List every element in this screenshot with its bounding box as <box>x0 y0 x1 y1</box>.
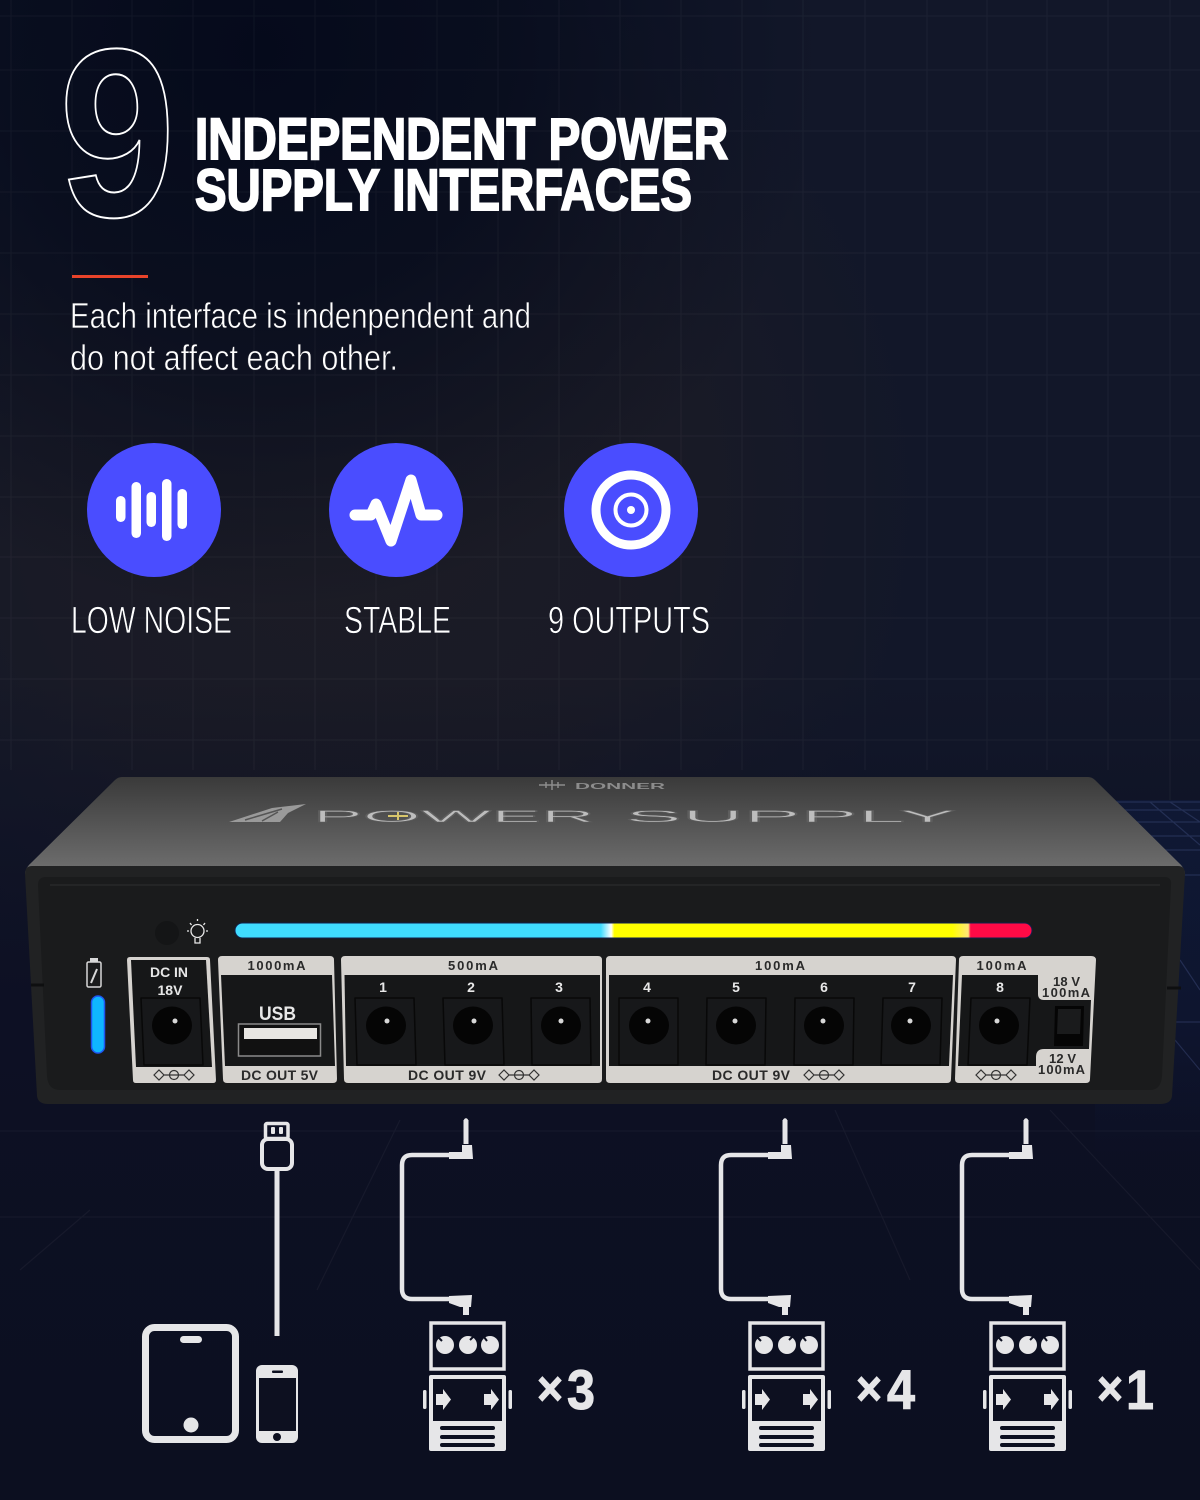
device front frame <box>25 866 1185 1104</box>
panel: 100mA outputs 4-7: 100mA <box>755 958 806 973</box>
polarity symbol <box>154 1070 194 1080</box>
voltage switch <box>1054 1006 1084 1046</box>
icon: battery <box>87 958 101 987</box>
brand logo and text: DONNER <box>575 782 666 791</box>
icon: tablet <box>146 1328 236 1440</box>
icon: phone <box>256 1365 298 1443</box>
switch labels: 100mA <box>1042 985 1091 1000</box>
jack 8 <box>968 998 1030 1065</box>
title: SUPPLY INTERFACES <box>195 158 692 223</box>
icon: sound wave <box>87 443 221 577</box>
feature: stable <box>329 443 463 642</box>
quantity label: 3 <box>567 1358 595 1421</box>
panel: output 8 with voltage switch: 8 <box>996 979 1004 995</box>
panel: 100mA outputs 4-7: 7 <box>908 979 916 995</box>
panel: 500mA outputs 1-3: 500mA <box>448 958 499 973</box>
title: INDEPENDENT POWER <box>195 107 728 172</box>
LED indicator bar <box>235 923 1032 938</box>
cable and pedal group: 4 pedals <box>721 1118 915 1451</box>
panel: USB 1000mA: DC OUT 5V <box>241 1067 319 1083</box>
title <box>195 107 728 223</box>
feature: low noise: LOW NOISE <box>71 600 232 642</box>
panel: 100mA outputs 4-7: 5 <box>732 979 740 995</box>
audio cable <box>962 1118 1033 1315</box>
pedal <box>742 1323 831 1451</box>
panel: DC in <box>127 957 216 1083</box>
pedal <box>423 1323 512 1451</box>
panel: 500mA outputs 1-3: 2 <box>467 979 475 995</box>
quantity label: 4 <box>887 1358 915 1421</box>
quantity label <box>1097 1358 1154 1421</box>
icon: target <box>564 443 698 577</box>
cable and pedal group: 3 pedals <box>402 1118 595 1451</box>
panel: 500mA outputs 1-3: DC OUT 9V <box>408 1067 487 1083</box>
audio cable <box>402 1118 473 1315</box>
polarity symbol <box>499 1070 539 1080</box>
USB cable <box>262 1124 292 1336</box>
product name: POWER <box>313 807 595 826</box>
light button <box>155 921 179 945</box>
jacks 1-3 <box>355 998 591 1065</box>
USB port <box>238 1024 320 1056</box>
switch labels: 18 V <box>1053 974 1080 989</box>
switch labels: 12 V <box>1049 1051 1076 1066</box>
big outlined numeral 9: 9 <box>59 0 176 267</box>
panel: 100mA outputs 4-7: DC OUT 9V <box>712 1067 791 1083</box>
quantity label <box>537 1358 595 1421</box>
panel: USB 1000mA: USB <box>259 1004 296 1025</box>
product name <box>313 807 956 826</box>
feature: 9 outputs <box>548 443 710 642</box>
power supply device <box>25 777 1185 1104</box>
DC in jack <box>141 998 203 1065</box>
description text <box>70 295 531 378</box>
panel: 500mA outputs 1-3: 3 <box>555 979 563 995</box>
quantity label <box>856 1358 915 1421</box>
brand logo and text <box>539 780 666 791</box>
panel: DC in: DC IN <box>150 964 188 980</box>
panel: 100mA outputs 4-7: 4 <box>643 979 651 995</box>
feature: 9 outputs: 9 OUTPUTS <box>548 600 710 642</box>
panel: 500mA outputs 1-3 <box>341 956 602 1083</box>
product name: SUPPLY <box>625 807 956 826</box>
description text: Each interface is indenpendent and <box>70 295 531 336</box>
switch labels: 100mA <box>1038 1062 1086 1077</box>
jacks 4-7 <box>619 998 942 1065</box>
quantity label: × <box>1097 1363 1123 1416</box>
red accent divider <box>72 275 148 278</box>
quantity label: × <box>856 1363 882 1416</box>
panel: 100mA outputs 4-7: 6 <box>820 979 828 995</box>
description text: do not affect each other. <box>70 337 398 378</box>
audio cable <box>721 1118 792 1315</box>
panel: output 8 with voltage switch <box>955 956 1096 1083</box>
feature: low noise <box>71 443 232 642</box>
battery indicator light <box>92 996 104 1053</box>
feature: stable: STABLE <box>344 600 451 642</box>
panel: 100mA outputs 4-7 <box>606 956 956 1083</box>
panel: 500mA outputs 1-3: 1 <box>379 979 387 995</box>
panel: output 8 with voltage switch: 100mA <box>976 958 1027 973</box>
device top face <box>25 777 1185 874</box>
panel: USB 1000mA <box>218 956 337 1083</box>
pedal <box>983 1323 1072 1451</box>
icon: pulse <box>329 443 463 577</box>
device front inset <box>38 877 1171 1090</box>
cable and pedal group: 1 pedal <box>962 1118 1154 1451</box>
quantity label: 1 <box>1126 1358 1154 1421</box>
logo: lightning mark <box>229 804 306 822</box>
panel: DC in: 18V <box>158 982 183 998</box>
polarity symbol <box>976 1070 1016 1080</box>
polarity symbol <box>804 1070 844 1080</box>
icon: light bulb <box>187 919 208 943</box>
quantity label: × <box>537 1363 563 1416</box>
panel: USB 1000mA: 1000mA <box>248 958 306 973</box>
switch labels <box>1038 974 1091 1077</box>
